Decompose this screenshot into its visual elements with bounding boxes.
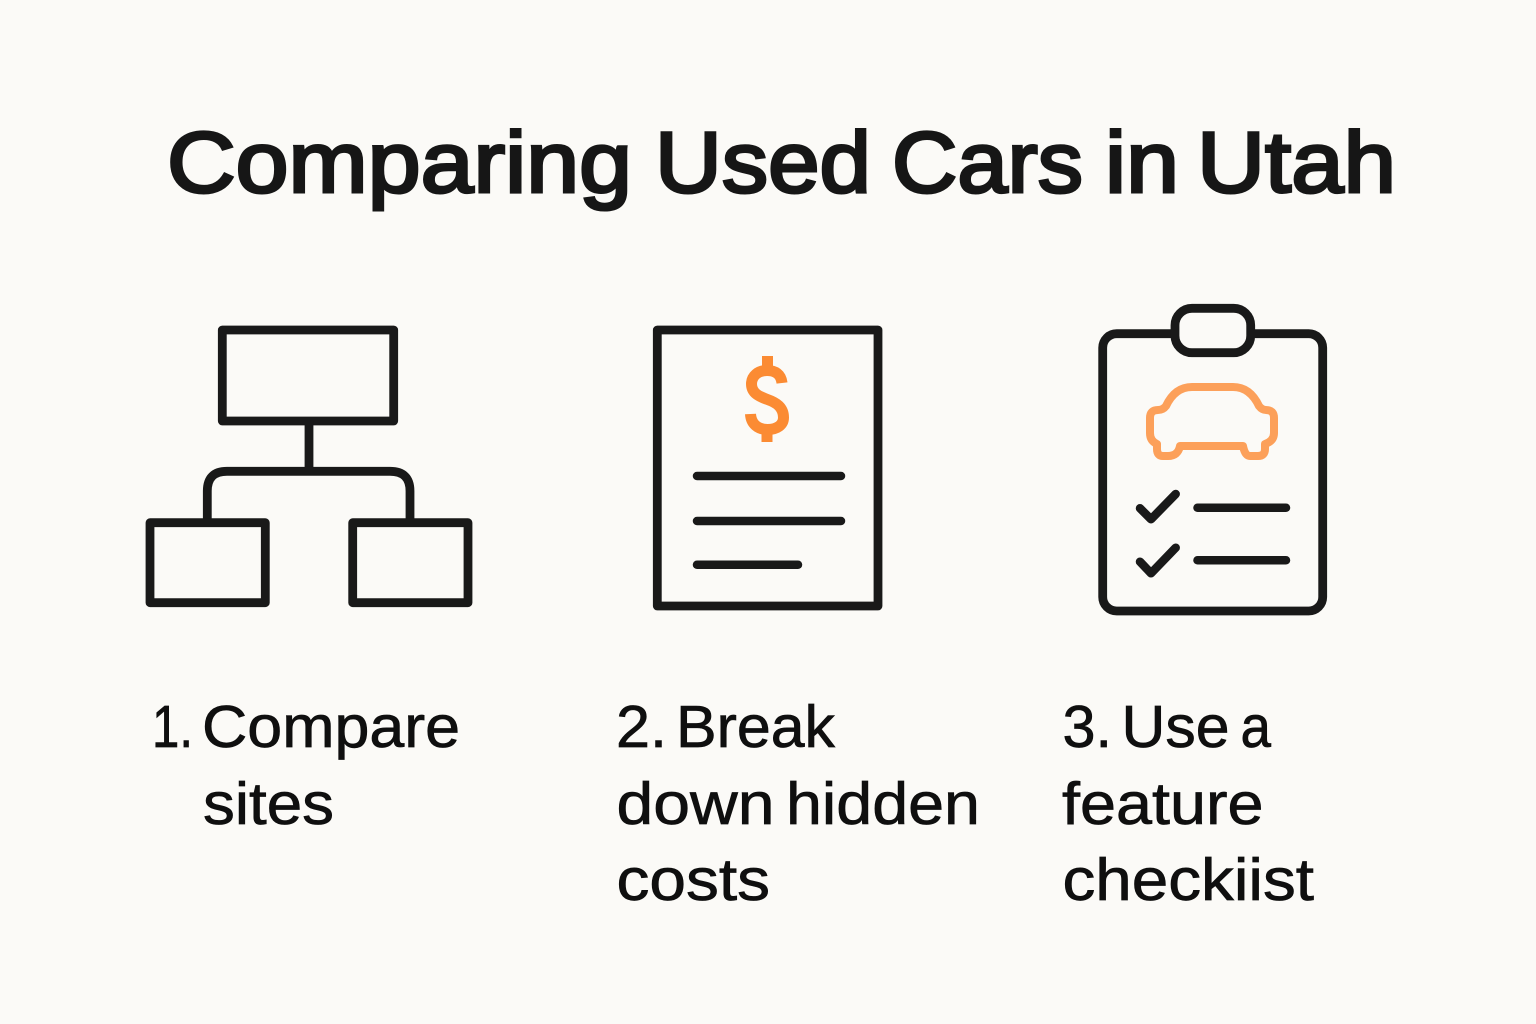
step 2 label: hidden [786,771,980,837]
title: Used [655,115,871,211]
step 1 label [152,694,460,837]
step 2 label: 2. [616,694,667,760]
checklist [1140,494,1286,573]
step 3 label: a [1240,694,1271,760]
step 2 label: costs [616,847,770,913]
step 2 label [616,694,980,913]
title: Comparing [167,115,632,211]
step 1 label: sites [203,771,334,837]
title: Cars [892,115,1083,211]
step 1 label: Compare [202,694,460,760]
step 2 label: Break [676,694,836,760]
step 3 label [1062,694,1314,913]
car outline [1150,387,1274,456]
text lines [697,476,841,565]
step 3 label: feature [1062,771,1264,837]
icon: site comparison hierarchy [150,330,468,603]
dollar sign [750,356,784,442]
title [167,115,1396,211]
icon: cost document [657,330,878,606]
step 1 label: 1. [152,694,193,760]
step 3 label: Use [1122,694,1230,760]
step 2 label: down [616,771,774,837]
title: in [1105,115,1179,211]
step 3 label: checkiist [1062,847,1314,913]
step 3 label: 3. [1062,694,1112,760]
icon: car checklist clipboard [1103,308,1323,611]
title: Utah [1197,115,1396,211]
